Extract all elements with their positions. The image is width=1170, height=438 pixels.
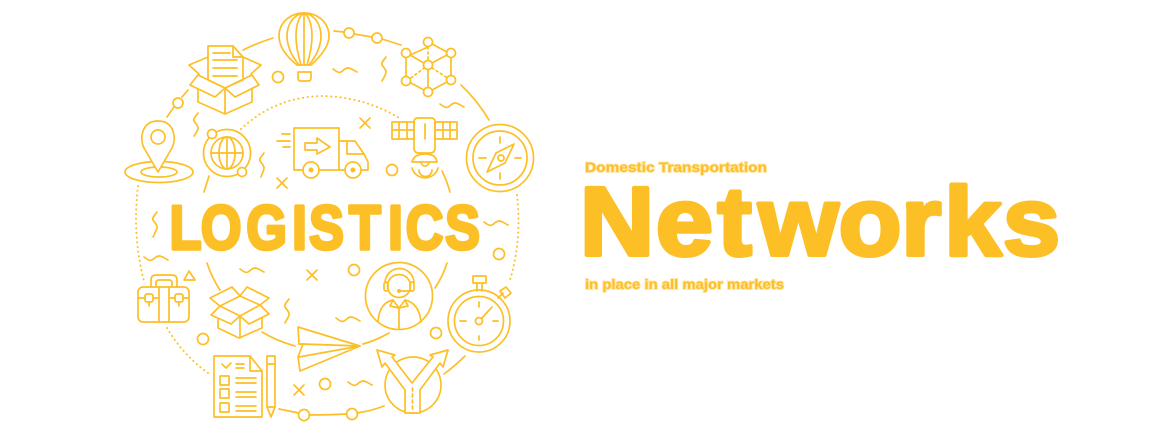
icon: paper plane [298, 327, 360, 371]
logistics wordmark: LOGISTICS [170, 194, 480, 263]
icon: open cardboard box [210, 287, 269, 338]
icon: map pin [125, 121, 193, 182]
icon: diverging road arrows [377, 350, 448, 413]
caption: in place in all major markets: in place in all major markets [585, 276, 784, 292]
logistics icon ring [125, 13, 534, 420]
solid connecting arcs and nodes [167, 28, 489, 420]
decorative circles, squiggles and crosses [144, 57, 508, 395]
main heading: networks: Networks [580, 169, 1060, 276]
icon: delivery truck [277, 128, 368, 178]
icon: checklist and pencil [214, 356, 275, 417]
icon: satellite [392, 118, 457, 178]
icon: compass [466, 124, 534, 192]
icon: hot air balloon [279, 13, 329, 81]
dotted connecting arcs [136, 96, 518, 373]
icon: orbiting globe [204, 130, 250, 176]
icon: network cube [402, 38, 456, 96]
icon: suitcase [138, 275, 189, 322]
subheading: domestic transportation: Domestic Transportation [585, 159, 767, 175]
icon: stopwatch [448, 276, 511, 352]
icon: open box with document [189, 46, 261, 114]
icon: customer support agent [366, 262, 432, 330]
